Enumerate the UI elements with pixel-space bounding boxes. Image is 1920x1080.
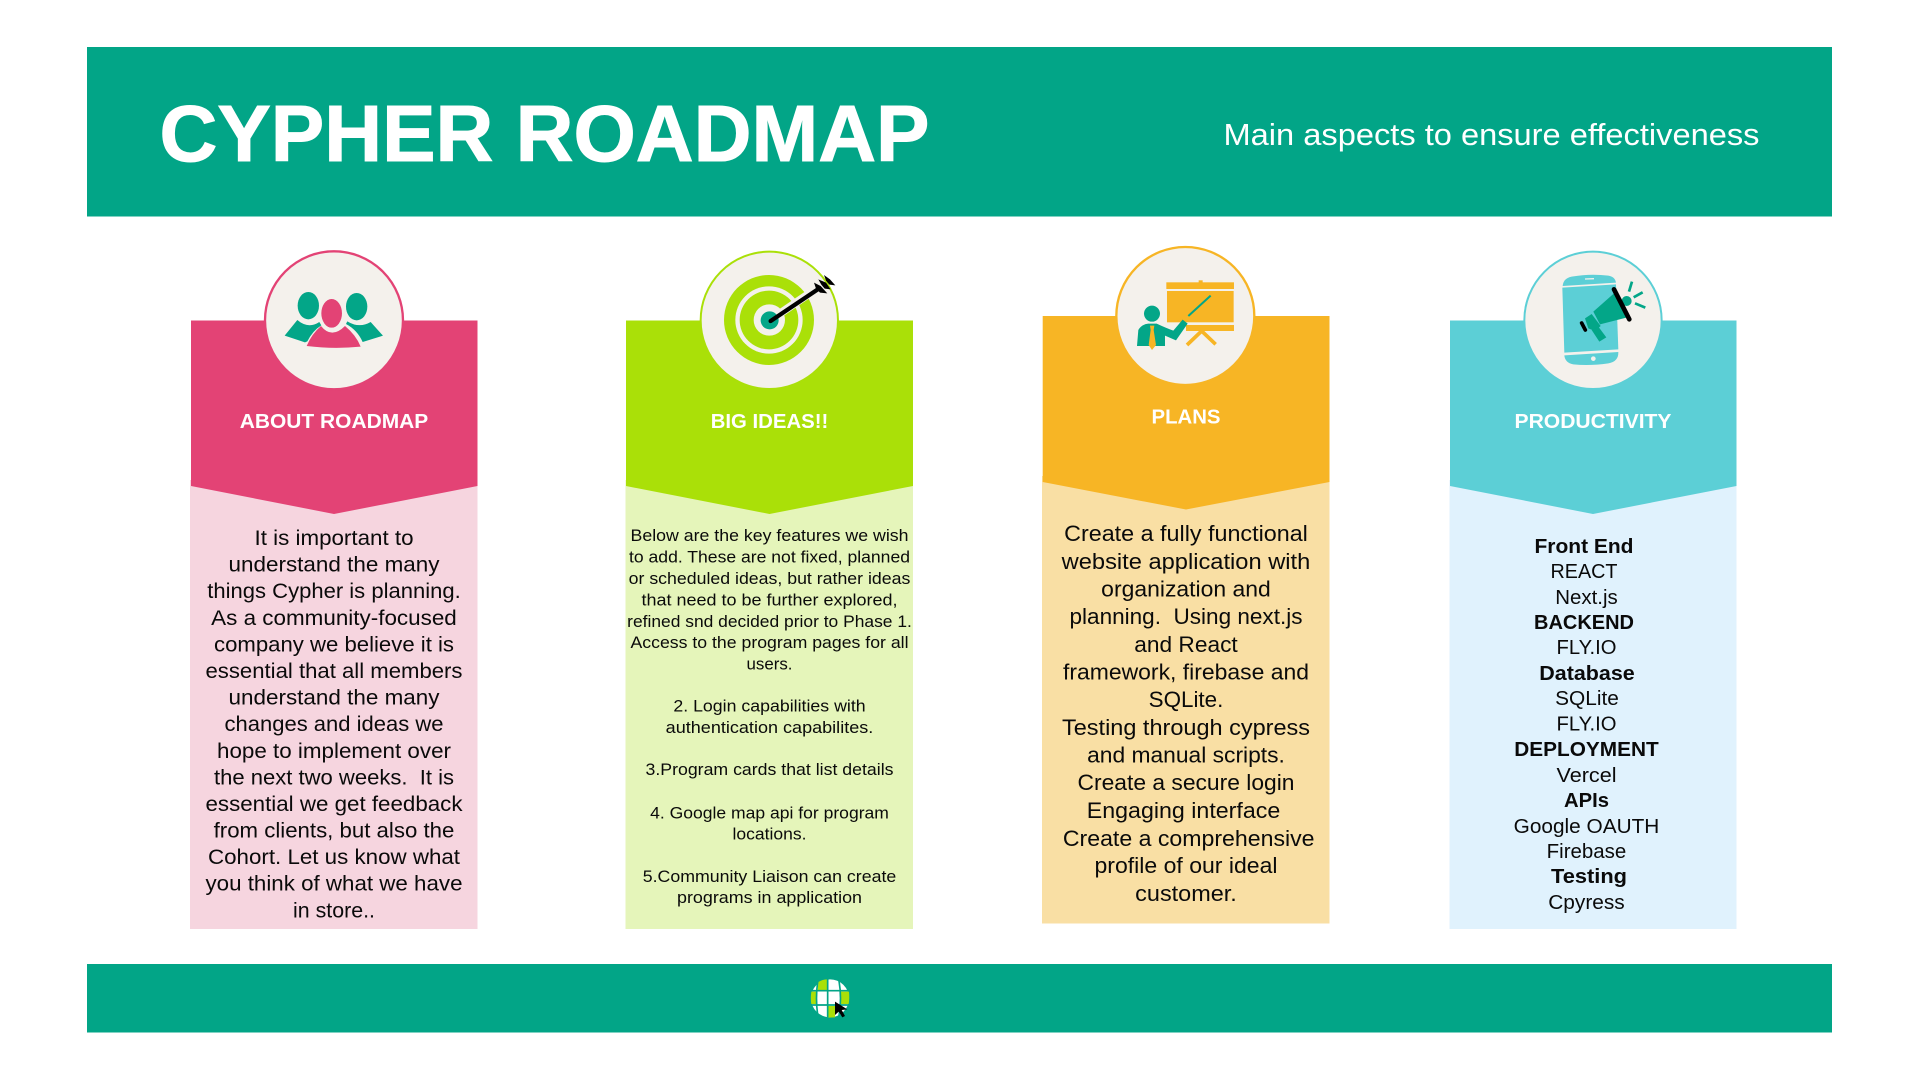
body text: REACT <box>1550 561 1618 583</box>
body text: organization and <box>1101 576 1271 602</box>
body text: Access to the program pages for all <box>630 634 908 652</box>
body text: Cpyress <box>1548 892 1625 914</box>
body text <box>627 527 912 907</box>
body text: from clients, but also the <box>214 820 454 843</box>
body text: changes and ideas we <box>224 713 444 736</box>
header shape <box>626 320 913 514</box>
body background <box>190 480 478 929</box>
body text <box>1514 536 1659 914</box>
header shape <box>1043 316 1330 510</box>
body text: As a community-focused <box>211 607 457 630</box>
icon: globe with cursor <box>811 979 849 1018</box>
body text: 4. Google map api for program <box>650 804 889 822</box>
body text: hope to implement over <box>217 740 451 763</box>
panel: plans <box>1042 247 1330 924</box>
body text: 3.Program cards that list details <box>646 761 894 779</box>
body text: in store.. <box>293 899 375 922</box>
body text: website application with <box>1061 549 1310 574</box>
body text: understand the many <box>228 687 440 710</box>
body text: users. <box>746 655 792 673</box>
body text <box>1061 521 1315 906</box>
icon: team of people <box>265 251 403 389</box>
body text: Database <box>1539 663 1635 685</box>
heading: PLANS <box>1152 406 1220 428</box>
panel: productivity <box>1450 252 1736 929</box>
body text: essential we get feedback <box>206 793 463 816</box>
body text: Vercel <box>1556 765 1616 787</box>
body text: 5.Community Liaison can create <box>643 868 896 886</box>
body text: SQLite. <box>1149 687 1223 712</box>
body text: to add. These are not fixed, planned <box>629 549 910 567</box>
body text: Next.js <box>1555 587 1618 609</box>
body text: Firebase <box>1547 841 1626 863</box>
title: CYPHER ROADMAP <box>160 89 929 178</box>
body text: things Cypher is planning. <box>207 580 461 603</box>
body text: Testing through cypress <box>1062 715 1310 740</box>
body text: locations. <box>732 826 806 844</box>
body text: APIs <box>1564 790 1609 812</box>
body text: DEPLOYMENT <box>1514 739 1659 761</box>
body text: you think of what we have <box>206 872 462 895</box>
body text: Testing <box>1551 866 1627 888</box>
body text: Create a secure login <box>1078 770 1294 795</box>
footer banner <box>87 964 1832 1032</box>
subtitle: Main aspects to ensure effectiveness <box>1224 117 1760 152</box>
icon: phone with megaphone <box>1524 252 1662 389</box>
body background <box>1042 476 1330 924</box>
body text: and React <box>1134 632 1238 657</box>
body text: authentication capabilites. <box>666 719 873 737</box>
body text: It is important to <box>254 527 414 550</box>
body text: Below are the key features we wish <box>630 527 908 545</box>
body text: Create a comprehensive <box>1063 826 1315 851</box>
body text: profile of our ideal <box>1094 853 1278 878</box>
header shape <box>1450 320 1736 514</box>
body text: refined snd decided prior to Phase 1. <box>627 613 912 631</box>
body text: Front End <box>1534 536 1634 558</box>
heading: PRODUCTIVITY <box>1514 410 1672 433</box>
body text: SQLite <box>1555 688 1619 710</box>
body text: essential that all members <box>206 660 462 683</box>
body text: Cohort. Let us know what <box>208 846 460 869</box>
body background <box>1450 480 1736 929</box>
body background <box>626 480 913 929</box>
panel: big ideas <box>626 252 913 929</box>
body text: BACKEND <box>1534 612 1634 634</box>
body text: Engaging interface <box>1087 798 1280 823</box>
body text: FLY.IO <box>1556 714 1616 736</box>
body text: programs in application <box>677 889 862 907</box>
body text: framework, firebase and <box>1063 660 1309 685</box>
panel: about roadmap <box>190 251 478 929</box>
body text: Google OAUTH <box>1514 816 1659 838</box>
body text: company we believe it is <box>214 633 454 656</box>
body text: the next two weeks. It is <box>214 766 454 789</box>
icon: target with arrow <box>701 252 838 389</box>
body text: 2. Login capabilities with <box>673 697 866 715</box>
body text: and manual scripts. <box>1087 743 1285 768</box>
header banner <box>87 47 1832 216</box>
body text: or scheduled ideas, but rather ideas <box>629 570 910 588</box>
body text: understand the many <box>228 554 440 577</box>
body text: that need to be further explored, <box>642 591 898 609</box>
body text: customer. <box>1135 881 1237 906</box>
icon: presenter at a board <box>1116 247 1254 385</box>
body text: Create a fully functional <box>1064 521 1308 546</box>
body text: planning. Using next.js <box>1070 604 1302 629</box>
header shape <box>191 320 478 514</box>
body text <box>206 527 463 922</box>
heading: ABOUT ROADMAP <box>240 410 428 433</box>
heading: BIG IDEAS!! <box>711 410 828 433</box>
body text: FLY.IO <box>1556 637 1616 659</box>
